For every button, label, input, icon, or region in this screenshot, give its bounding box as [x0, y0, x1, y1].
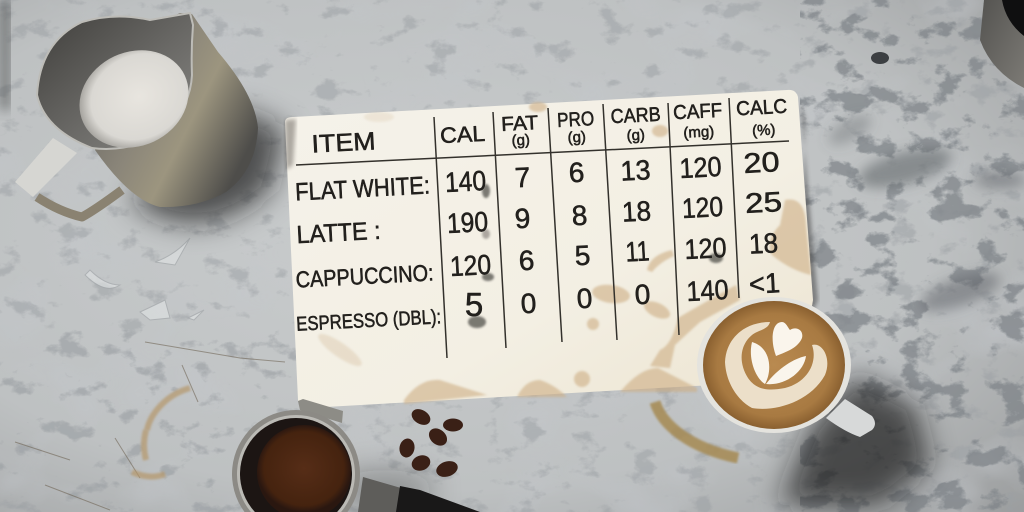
row: flat white: 140: [444, 165, 487, 198]
row: espresso: [296, 267, 781, 336]
row: latte: 190: [446, 206, 489, 239]
coffee stains: [315, 102, 811, 404]
row: espresso: ESPRESSO (DBL):: [296, 306, 442, 336]
header row: FAT: [501, 112, 539, 136]
basket inner: [237, 415, 355, 512]
row: cappuccino: [295, 227, 779, 293]
row: latte: LATTE :: [296, 217, 381, 249]
row: cappuccino: 120: [449, 249, 492, 282]
header row: (g): [567, 129, 586, 146]
header row: (mg): [683, 123, 715, 142]
row: cappuccino: CAPPUCCINO:: [295, 259, 434, 293]
row: cappuccino: 11: [625, 235, 650, 268]
row: cappuccino: 18: [748, 227, 779, 260]
card sheet: [285, 90, 813, 408]
pitcher opening: [37, 13, 193, 149]
basket rim: [232, 410, 360, 512]
paper card: [285, 90, 813, 408]
header row: [311, 96, 788, 159]
row: latte: 18: [621, 195, 652, 228]
ink smudges: [468, 184, 723, 328]
cup handle: [826, 399, 875, 437]
cup rim: [697, 297, 851, 433]
scratches: [15, 342, 285, 510]
water marks: [85, 238, 204, 320]
row: cappuccino: 5: [574, 240, 591, 271]
row: flat white: 7: [514, 162, 531, 193]
header row: (%): [752, 121, 776, 140]
row: latte: 25: [744, 186, 783, 219]
milk: [63, 33, 205, 165]
header row: ITEM: [311, 127, 376, 159]
pitcher handle: [15, 138, 122, 217]
header row: CAL: [439, 121, 486, 148]
row: flat white: [294, 146, 780, 207]
second pitcher corner: [980, 0, 1024, 88]
row: flat white: 20: [743, 146, 780, 179]
coffee ring on marble: [132, 388, 190, 477]
portafilter lug: [298, 399, 343, 423]
milk pitcher: [15, 13, 258, 217]
row: espresso: 5: [465, 286, 483, 323]
row: flat white: 13: [620, 154, 651, 187]
header row: PRO: [557, 108, 595, 132]
card shadow: [800, 100, 818, 340]
latte art: [725, 322, 827, 409]
row: latte: [296, 186, 783, 249]
header row: CARB: [610, 104, 661, 128]
marble spot: [871, 52, 889, 64]
row: espresso: <1: [748, 267, 781, 300]
leaf right: [766, 356, 806, 384]
row: latte: 120: [681, 191, 724, 224]
header row: CALC: [736, 96, 788, 120]
pitcher interior: [1002, 0, 1024, 36]
row: espresso: 140: [686, 274, 729, 307]
leaf left: [751, 342, 769, 384]
row: espresso: 0: [520, 288, 537, 319]
row: espresso: 0: [634, 279, 651, 310]
coffee beans: [398, 406, 463, 480]
table rules: [296, 98, 789, 358]
row: cappuccino: 120: [684, 232, 727, 265]
portafilter neck: [358, 477, 401, 512]
row: flat white: 120: [679, 151, 722, 184]
basket well: [240, 418, 352, 512]
corner smudge: [285, 119, 296, 170]
header row: (g): [511, 132, 530, 149]
row: cappuccino: 6: [518, 245, 535, 276]
row: latte: 9: [514, 203, 531, 234]
row: flat white: 6: [568, 157, 585, 188]
outer swirl: [725, 322, 827, 409]
portafilter: [232, 399, 480, 512]
header row: (g): [626, 127, 645, 144]
row: espresso: 0: [576, 283, 593, 314]
row: latte: 8: [571, 200, 588, 231]
left edge shadow: [0, 0, 10, 110]
ground coffee: [257, 425, 351, 512]
latte cup: [697, 297, 875, 437]
heart top: [773, 322, 802, 356]
dark marble clusters: [824, 109, 1024, 320]
pitcher wall: [980, 0, 1024, 88]
coffee surface: [703, 301, 845, 429]
pitcher body: [95, 13, 258, 207]
portafilter handle: [396, 486, 480, 512]
header row: CAFF: [673, 100, 723, 124]
shadows: [130, 110, 930, 510]
row: flat white: FLAT WHITE:: [294, 171, 431, 207]
coffee spill on marble: [655, 402, 738, 458]
